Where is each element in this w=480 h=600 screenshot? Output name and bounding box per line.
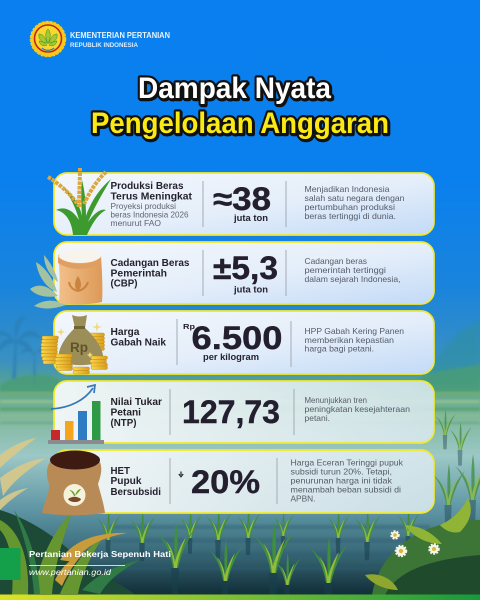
footer tagline: Pertanian Bekerja Sepenuh Hati [29, 549, 171, 559]
label: menurut FAO [110, 218, 161, 228]
ministry name: REPUBLIK INDONESIA [70, 42, 138, 49]
palm trees silhouette [0, 316, 50, 385]
description: menambah beban subsidi di [290, 485, 401, 495]
icon: bar chart with arrow [48, 385, 104, 444]
label: HET [110, 466, 130, 477]
label: Pemerintah [110, 268, 167, 280]
ministry name [70, 31, 170, 49]
description [304, 326, 404, 354]
label [110, 327, 166, 349]
description [290, 458, 404, 503]
rice seedlings in water [97, 508, 419, 600]
footer tagline: www.pertanian.go.id [29, 568, 112, 577]
panel: cadangan beras [30, 242, 434, 309]
panel: nilai tukar petani [48, 381, 434, 444]
description: Menjadikan Indonesia [304, 184, 390, 194]
label: Pupuk [110, 476, 142, 487]
label: Harga [110, 327, 140, 338]
description: salah satu negara dengan [304, 193, 405, 203]
description: petani. [304, 413, 330, 423]
grain left upper [0, 438, 46, 510]
small flower centres [393, 533, 436, 553]
description [304, 184, 405, 221]
figure: juta ton [233, 213, 268, 223]
description: HPP Gabah Kering Panen [304, 326, 404, 336]
description: Harga Eceran Teringgi pupuk [290, 458, 404, 468]
foreground shrub with flowers: right [365, 498, 480, 595]
description [304, 256, 400, 284]
label [110, 466, 161, 498]
rice seedlings around upper field [433, 410, 480, 528]
figure: per kilogram [203, 352, 259, 362]
icon: rice sprigs [30, 255, 66, 309]
figure: 20% [191, 464, 260, 500]
description: harga bagi petani. [304, 344, 374, 354]
label: (NTP) [110, 418, 136, 429]
icon: rice sack [58, 249, 102, 304]
label: Bersubsidi [110, 487, 161, 498]
icon: money bag and coins: Rp [70, 340, 88, 355]
panel: harga gabah [41, 311, 434, 374]
title: Pengelolaan Anggaran [91, 107, 389, 140]
label: Proyeksi produksi [110, 201, 176, 211]
ministry name: KEMENTERIAN PERTANIAN [70, 31, 170, 40]
label: Nilai Tukar [110, 397, 162, 408]
figure: 127,73 [182, 394, 280, 430]
description: APBN. [290, 493, 316, 503]
label: (CBP) [110, 279, 138, 290]
label: Terus Meningkat [110, 192, 193, 202]
description: memberikan kepastian [304, 335, 394, 345]
figure [183, 320, 282, 362]
description [304, 395, 410, 423]
description: peningkatan kesejahteraan [304, 404, 410, 414]
icon: rice plant [48, 168, 111, 235]
foreground rice stalks: left [0, 510, 140, 595]
label [110, 181, 193, 228]
description: Cadangan beras [304, 256, 367, 266]
figure: ±5,3 [213, 250, 278, 286]
description: subsidi turun 20%. Tetapi, [290, 467, 392, 477]
icon: money bag and coins [41, 315, 108, 374]
field terraces [0, 392, 480, 424]
label: Gabah Naik [110, 338, 166, 349]
title: Dampak Nyata [138, 72, 331, 105]
water ripples [110, 525, 430, 571]
title [91, 72, 389, 140]
label [110, 258, 190, 290]
figure: 6.500 [192, 320, 282, 356]
description: pertumbuhan produksi [304, 202, 395, 212]
description: Menunjukkan tren [304, 395, 367, 405]
label: beras Indonesia 2026 [110, 210, 189, 220]
flowers [392, 532, 438, 556]
figure: juta ton [233, 284, 268, 294]
description: dalam sejarah Indonesia, [304, 274, 400, 284]
description: penurunan harga ini tidak [290, 476, 393, 486]
label: Cadangan Beras [110, 258, 190, 269]
footer tagline [0, 548, 171, 580]
description: beras tertinggi di dunia. [304, 211, 396, 221]
figure: ≈38 [213, 181, 271, 217]
label [110, 397, 162, 429]
panel: produksi beras [48, 168, 434, 235]
icon: fertilizer sack [42, 450, 105, 515]
figure: Rp [183, 322, 195, 331]
distant hills [425, 320, 480, 385]
logo: Kementerian Pertanian emblem [30, 22, 66, 56]
bottom gradient bar [0, 594, 480, 600]
panel: het pupuk [42, 450, 434, 515]
label: Produksi Beras [110, 181, 184, 192]
description: pemerintah tertinggi [304, 265, 386, 275]
label: Petani [110, 408, 141, 419]
